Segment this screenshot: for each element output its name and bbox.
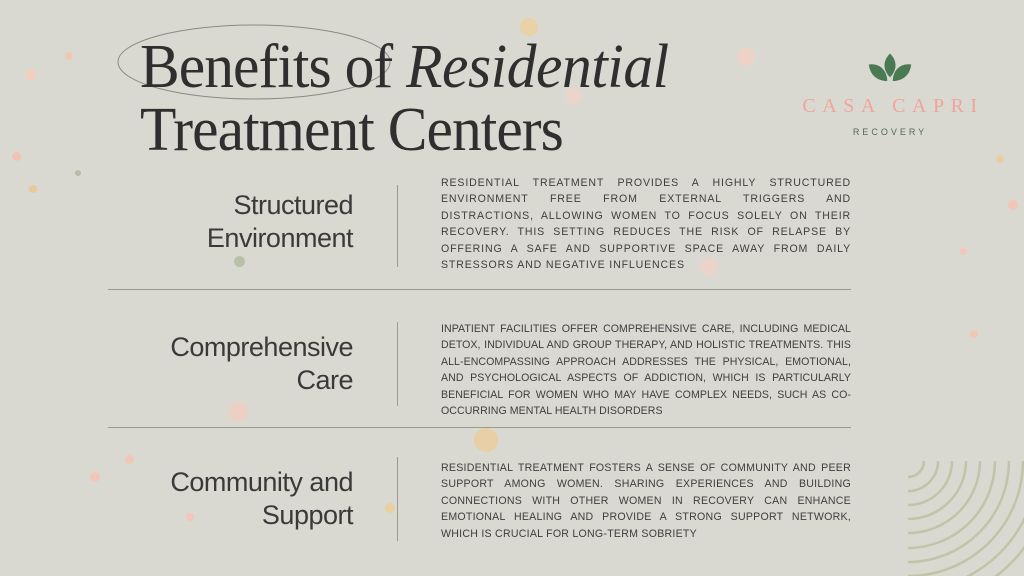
heading <box>170 332 353 395</box>
logo <box>802 54 984 137</box>
heading: Support <box>262 500 353 530</box>
title <box>118 24 669 164</box>
title ellipse <box>118 24 390 100</box>
heading: Care <box>296 365 353 395</box>
heading: Structured <box>233 190 353 220</box>
heading <box>170 467 354 530</box>
heading <box>207 190 354 253</box>
icon: leaves <box>868 54 912 81</box>
title: Treatment Centers <box>140 96 563 164</box>
text: RESIDENTIAL TREATMENT FOSTERS A SENSE OF COMMUNITY AND PEER SUPPORT AMONG WOMEN. SHARING EXPERIENCES AND BUILDING CONNECTIONS WITH OTHER WOMEN IN RECOVERY CAN ENHANCE EMOTIONAL HEALING AND PROVIDE A STRONG SUPPORT NETWORK, WHICH IS CRUCIAL FOR LONG-TERM SOBRIETY <box>441 462 851 540</box>
heading: Environment <box>207 223 353 253</box>
title: Benefits of Residential <box>140 33 669 101</box>
heading: Comprehensive <box>170 332 353 362</box>
text: INPATIENT FACILITIES OFFER COMPREHENSIVE CARE, INCLUDING MEDICAL DETOX, INDIVIDUAL AND GROUP THERAPY, AND HOLISTIC TREATMENTS. THIS ALL-ENCOMPASSING APPROACH ADDRESSES THE PHYSICAL, EMOTIONAL, AND PSYCHOLOGICAL ASPECTS OF ADDICTION, WHICH IS PARTICULARLY BENEFICIAL FOR WOMEN WHO MAY HAVE COMPLEX NEEDS, SUCH AS CO-OCCURRING MENTAL HEALTH DISORDERS <box>441 323 851 417</box>
heading: Community and <box>170 467 353 497</box>
decorative arcs <box>908 461 1024 576</box>
section: community and support <box>170 457 851 541</box>
logo: RECOVERY <box>853 127 927 137</box>
section: comprehensive care <box>170 322 851 417</box>
logo: CASA CAPRI <box>802 95 984 117</box>
section: structured environment <box>207 177 851 271</box>
text: RESIDENTIAL TREATMENT PROVIDES A HIGHLY STRUCTURED ENVIRONMENT FREE FROM EXTERNAL TRIGGERS AND DISTRACTIONS, ALLOWING WOMEN TO FOCUS SOLELY ON THEIR RECOVERY. THIS SETTING REDUCES THE RISK OF RELAPSE BY OFFERING A SAFE AND SUPPORTIVE SPACE AWAY FROM DAILY STRESSORS AND NEGATIVE INFLUENCES <box>441 177 851 271</box>
